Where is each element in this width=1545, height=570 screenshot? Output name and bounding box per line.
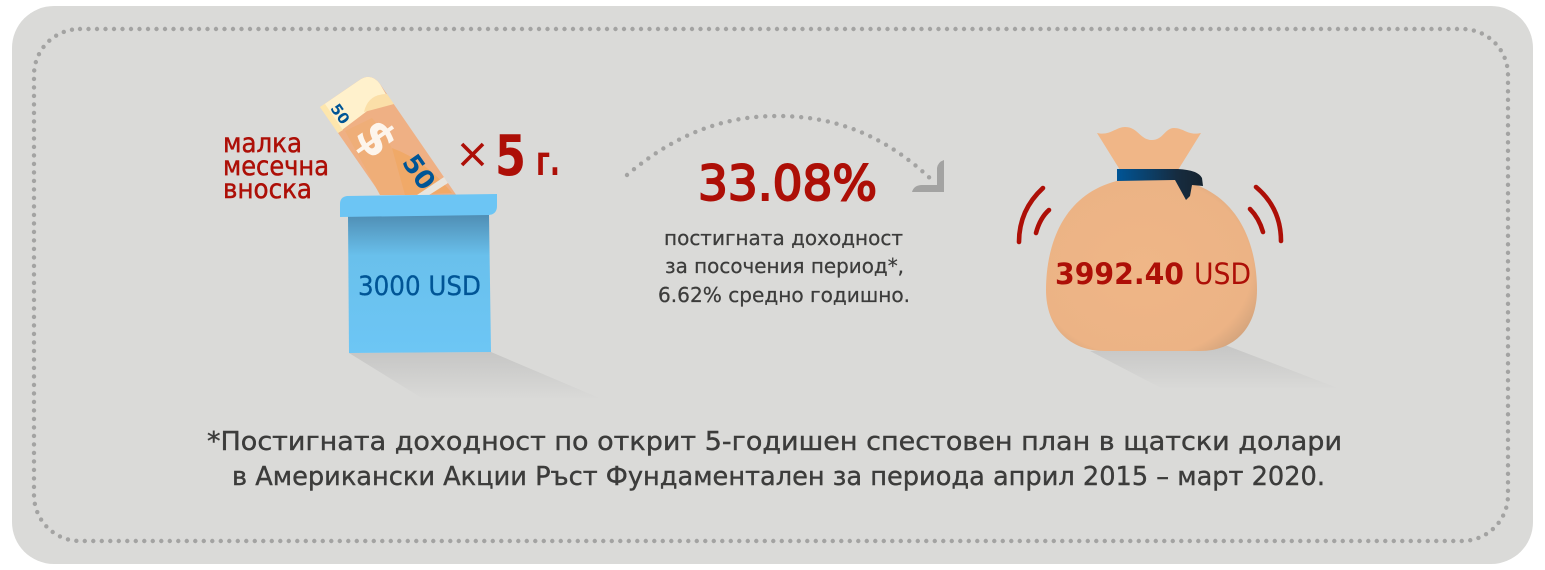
icon: banknote bbox=[320, 76, 456, 195]
return figure: 33.08% bbox=[698, 156, 877, 212]
return description: за посочения период*, bbox=[665, 254, 904, 278]
banknote dollar sign: $ bbox=[344, 109, 409, 168]
return description bbox=[658, 226, 910, 307]
box shadow bbox=[349, 352, 604, 400]
bag shadow bbox=[1090, 345, 1343, 390]
dotted arrow bbox=[627, 116, 944, 192]
label: times five years: 5 bbox=[495, 124, 526, 189]
banknote value large: 50 bbox=[396, 149, 441, 196]
banknote value small: 50 bbox=[327, 100, 353, 128]
bag amount: 3992.40 bbox=[1055, 257, 1184, 291]
label: times five years bbox=[462, 124, 560, 189]
label: monthly contribution: вноска bbox=[223, 174, 312, 205]
bag currency: USD bbox=[1194, 257, 1251, 291]
box lid bbox=[340, 194, 497, 217]
return description: постигната доходност bbox=[664, 226, 903, 250]
vibration arcs bbox=[1019, 187, 1281, 242]
right group: money bag bbox=[1019, 127, 1343, 390]
footnote: *Постигната доходност по открит 5-годишен спестовен план в щатски долари bbox=[207, 427, 1342, 457]
box amount: 3000 USD bbox=[358, 271, 481, 302]
label: monthly contribution bbox=[223, 128, 329, 205]
return description: 6.62% средно годишно. bbox=[658, 283, 910, 307]
bag tie bbox=[1117, 169, 1203, 200]
label: monthly contribution: месечна bbox=[223, 151, 329, 182]
footnote bbox=[207, 427, 1342, 492]
bag body bbox=[1046, 177, 1257, 351]
bag neck bbox=[1097, 127, 1201, 170]
label: times five years: г. bbox=[536, 137, 560, 185]
arrow head bbox=[912, 160, 944, 192]
left group: deposit box with banknote bbox=[320, 77, 604, 400]
box body bbox=[348, 214, 491, 353]
footnote: в Американски Акции Ръст Фундаментален за периода април 2015 – март 2020. bbox=[232, 462, 1325, 492]
label: monthly contribution: малка bbox=[223, 128, 302, 159]
